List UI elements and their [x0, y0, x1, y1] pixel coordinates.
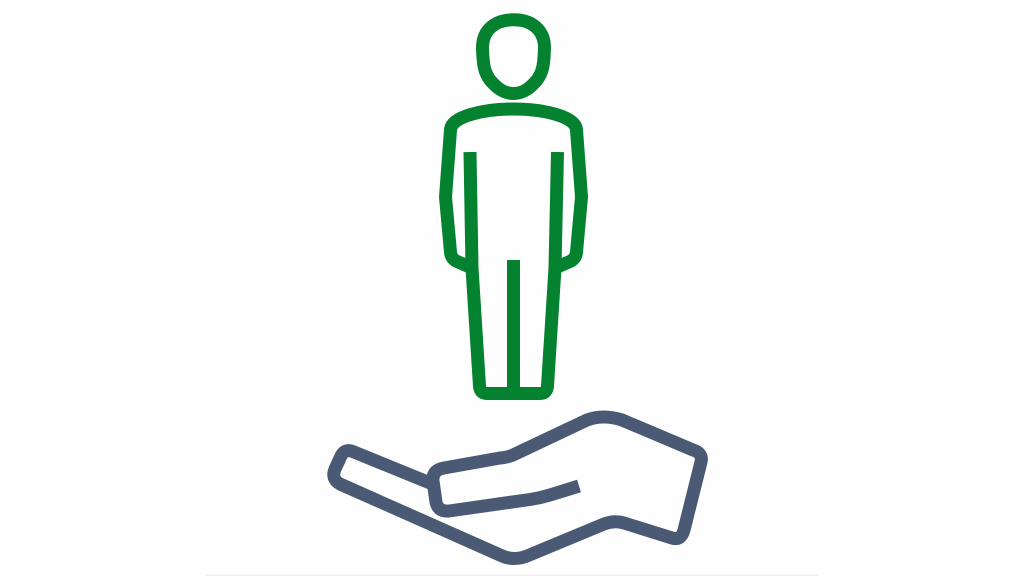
hand outline	[334, 417, 701, 559]
person left arm and leg line	[470, 152, 558, 394]
person body outline	[446, 109, 582, 268]
person leg divider	[507, 260, 520, 393]
icon: open hand	[334, 417, 701, 559]
person head	[482, 20, 544, 93]
icon: green person	[446, 20, 582, 394]
